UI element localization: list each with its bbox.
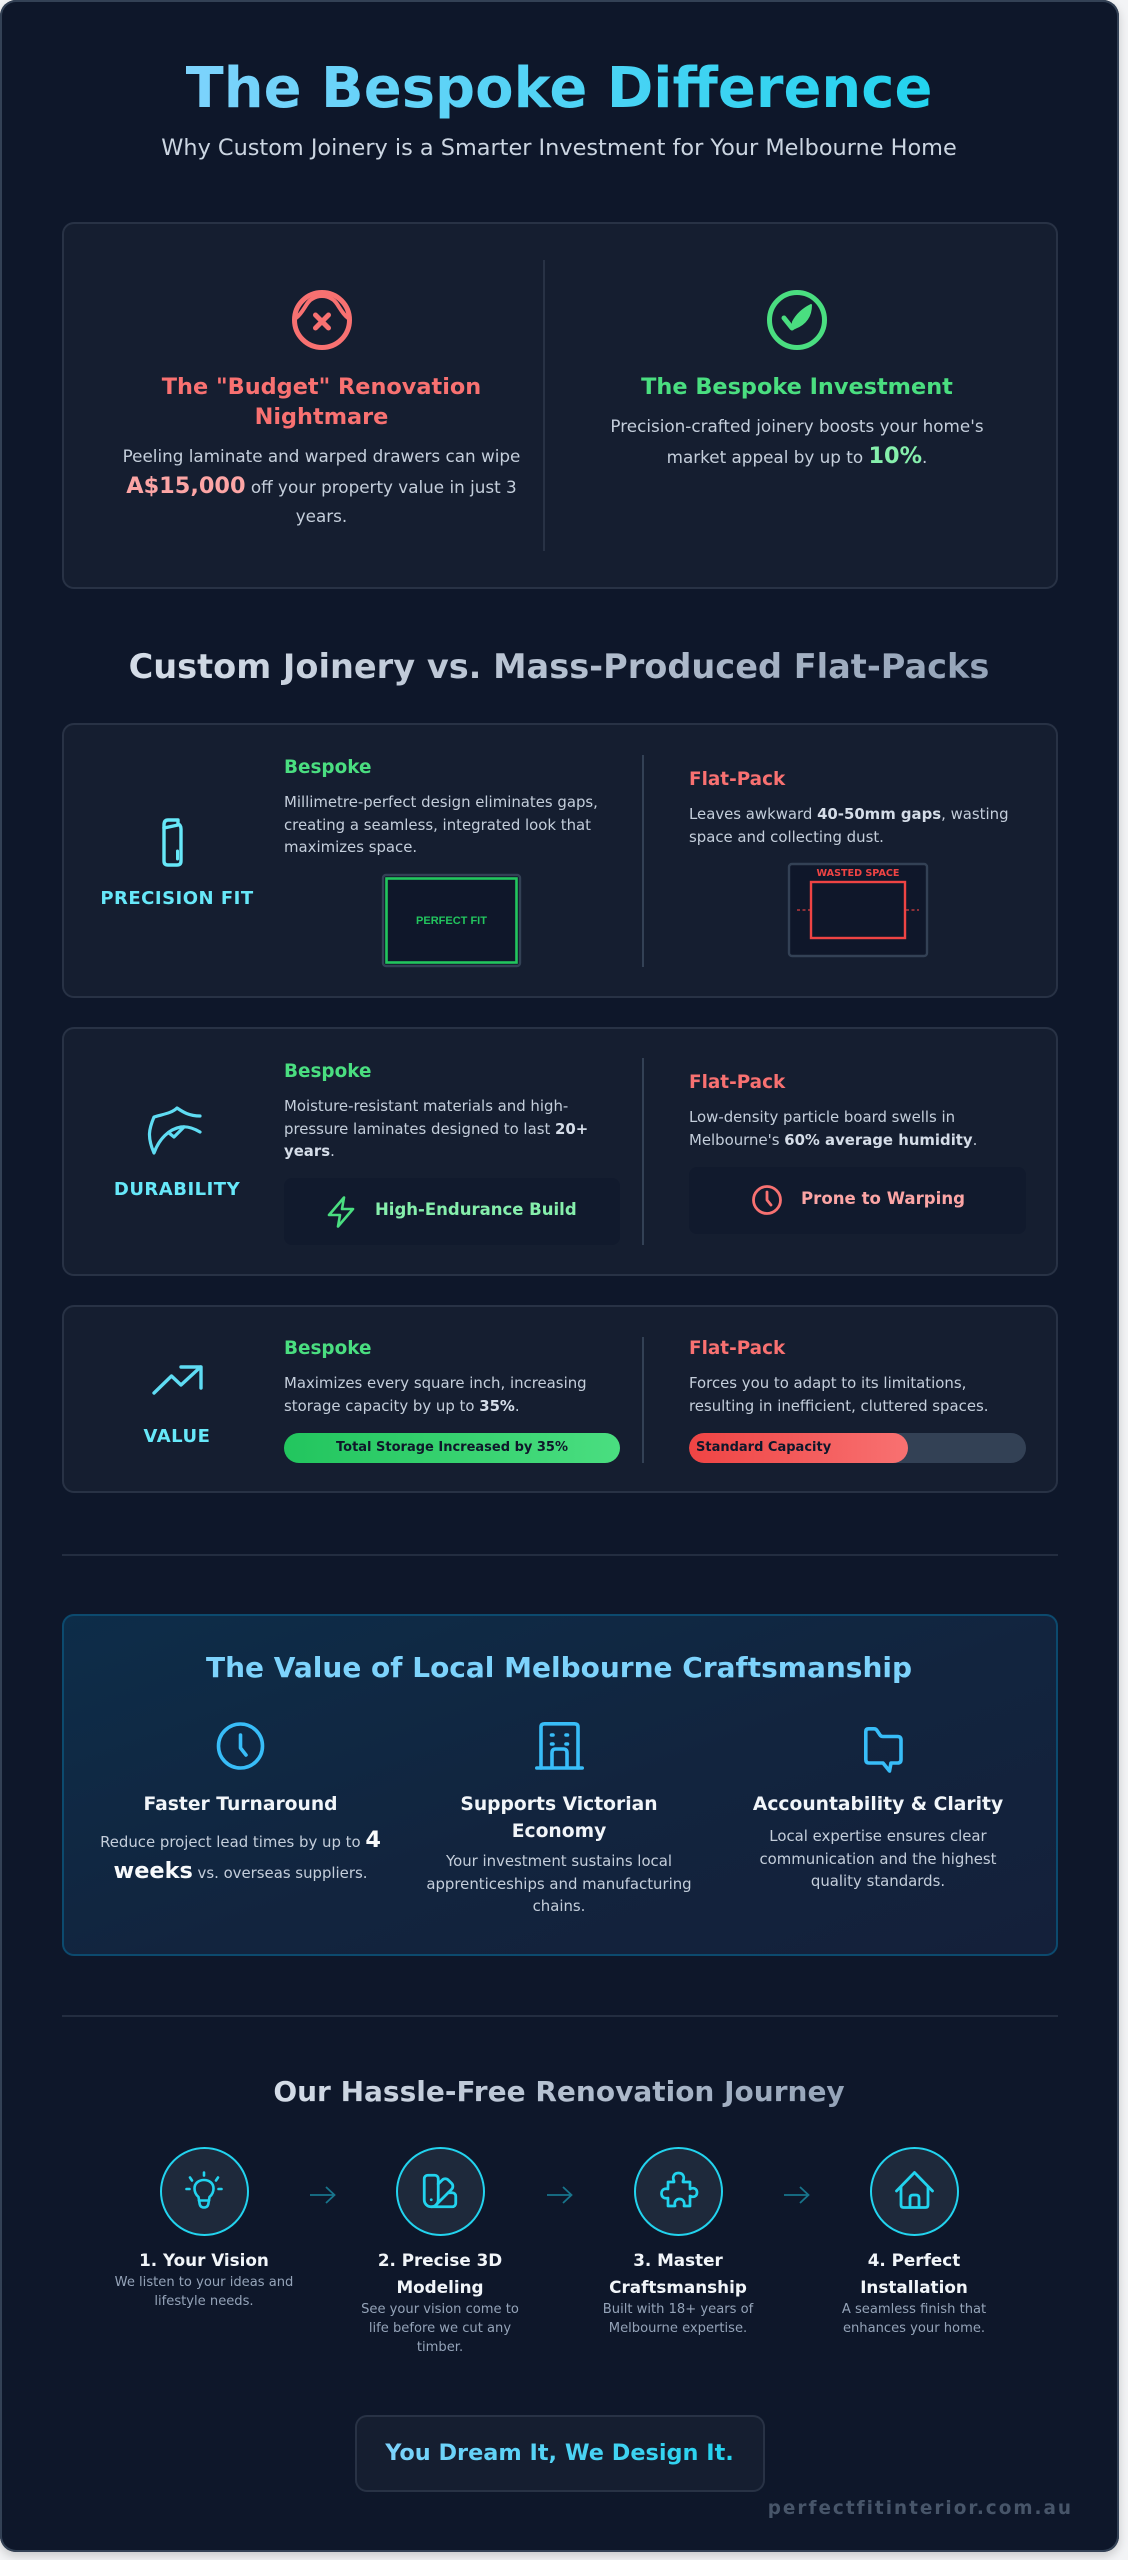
heading: bespoke: Bespoke: [284, 1061, 371, 1082]
panel: problem vs investment: [62, 222, 1058, 589]
icon: value trend: [152, 1365, 203, 1395]
bar fill: Standard Capacity: [696, 1440, 831, 1455]
heading: bespoke investment: The Bespoke Investment: [641, 374, 953, 400]
icon: speech bubble: [864, 1727, 903, 1773]
text: accountability: communication and the highest: [759, 1850, 997, 1868]
step text: [340, 2300, 540, 2357]
heading: budget nightmare: Nightmare: [255, 404, 388, 430]
call to action: [355, 2415, 765, 2492]
bar: total storage: [284, 1433, 620, 1463]
heading: local craftsmanship: The Value of Local Melbourne Craftsmanship: [206, 1651, 912, 1684]
divider: [642, 755, 644, 967]
text: accountability: quality standards.: [811, 1872, 945, 1890]
heading: flat-pack: Flat-Pack: [689, 1072, 785, 1093]
flat-pack column: [689, 769, 1009, 958]
text: bespoke: storage capacity by up to 35%.: [284, 1397, 520, 1415]
text: bespoke: Maximizes every square inch, increasing: [284, 1374, 587, 1392]
divider: [642, 1058, 644, 1245]
text: budget nightmare: [123, 446, 520, 526]
text: bespoke: Millimetre-perfect design eliminates gaps,: [284, 793, 598, 811]
text: bespoke: Moisture-resistant materials and high-: [284, 1097, 568, 1115]
panel: local craftsmanship: [62, 1614, 1058, 1956]
text: bespoke investment: [610, 416, 984, 468]
text: faster turnaround: Reduce project lead times by up to 4: [100, 1827, 381, 1853]
text: flat-pack: [689, 1108, 977, 1149]
step 2: [340, 2147, 540, 2359]
step title: 2. Precise 3D: [378, 2250, 502, 2270]
step text: We listen to your ideas and: [115, 2275, 293, 2290]
text: faster turnaround: [100, 1827, 381, 1884]
step text: lifestyle needs.: [154, 2294, 254, 2309]
icon: building: [535, 1722, 584, 1770]
flat-pack column: [689, 1338, 1026, 1463]
callout: high-endurance build: [284, 1178, 620, 1245]
heading: flat-pack: Flat-Pack: [689, 769, 785, 790]
icon: check circle: [767, 290, 827, 350]
icon: durability: [148, 1106, 202, 1155]
text: bespoke: maximizes space.: [284, 838, 417, 856]
icon: clock: [752, 1185, 782, 1215]
step title: [814, 2247, 1014, 2301]
step title: [340, 2247, 540, 2301]
step text: Built with 18+ years of: [603, 2302, 753, 2317]
bespoke column: [284, 1061, 588, 1228]
divider: [543, 260, 545, 551]
step text: enhances your home.: [843, 2321, 985, 2336]
text: flat-pack: [689, 805, 1009, 846]
arrow 2: [547, 2186, 573, 2204]
bespoke column: [284, 757, 598, 968]
text: bespoke: [284, 1374, 587, 1415]
step text: A seamless finish that: [842, 2302, 986, 2317]
step 4: [814, 2147, 1014, 2339]
heading: budget nightmare: The "Budget" Renovation: [162, 374, 481, 400]
step title: [578, 2247, 778, 2301]
heading: victorian economy: Supports Victorian: [460, 1794, 658, 1815]
heading: flat-pack: Flat-Pack: [689, 1338, 785, 1359]
text: victorian economy: [426, 1852, 692, 1915]
step text: See your vision come to: [361, 2302, 519, 2317]
heading: victorian economy: [460, 1794, 658, 1842]
text: bespoke: years.: [284, 1142, 335, 1160]
subtitle: Why Custom Joinery is a Smarter Investment for Your Melbourne Home: [161, 135, 957, 161]
text: bespoke investment: market appeal by up to 10%.: [667, 442, 927, 468]
column: victorian economy: [426, 1722, 692, 1915]
icon: precision fit: [162, 818, 183, 867]
panel: durability: [62, 1027, 1058, 1276]
icon: swatch book: [396, 2147, 485, 2236]
bar fill: [689, 1433, 908, 1463]
label: precision fit: PRECISION FIT: [100, 888, 254, 909]
icon: house: [870, 2147, 959, 2236]
text: bespoke: [284, 1097, 588, 1160]
text: flat-pack: Forces you to adapt to its limitations,: [689, 1374, 966, 1392]
text: bespoke: creating a seamless, integrated look that: [284, 816, 591, 834]
icon: lightning: [328, 1196, 354, 1228]
text: flat-pack: Leaves awkward 40-50mm gaps, wasting: [689, 805, 1009, 823]
step title: Modeling: [396, 2277, 484, 2297]
column: accountability: [753, 1727, 1003, 1890]
icon: budget warning circle: [292, 290, 352, 350]
step title: 3. Master: [633, 2250, 723, 2270]
text: accountability: [759, 1827, 997, 1890]
divider: [642, 1337, 644, 1463]
step text: Melbourne expertise.: [609, 2321, 747, 2336]
callout: prone to warping: [689, 1167, 1026, 1234]
arrow 1: [310, 2186, 336, 2204]
section heading: comparison: Custom Joinery vs. Mass-Produced Flat-Packs: [129, 647, 989, 686]
footer website: perfectfitinterior.com.au: [768, 2498, 1073, 2519]
diagram: perfect fit: PERFECT FIT: [416, 915, 487, 927]
step text: [115, 2275, 293, 2309]
diagram: perfect fit: [382, 874, 522, 968]
text: budget nightmare: Peeling laminate and warped drawers can wipe: [123, 446, 520, 466]
heading: victorian economy: Economy: [512, 1821, 606, 1842]
step title: Installation: [860, 2277, 968, 2297]
label: durability: DURABILITY: [114, 1179, 240, 1200]
text: flat-pack: space and collecting dust.: [689, 828, 884, 846]
heading: accountability: Accountability & Clarity: [753, 1794, 1003, 1815]
step text: life before we cut any: [369, 2321, 511, 2336]
text: flat-pack: [689, 1374, 988, 1415]
text: faster turnaround: weeks vs. overseas suppliers.: [114, 1858, 367, 1884]
bar: standard capacity: [689, 1433, 1026, 1463]
arrow 3: [784, 2186, 810, 2204]
text: flat-pack: Low-density particle board swells in: [689, 1108, 955, 1126]
column: faster turnaround: [100, 1722, 381, 1884]
text: accountability: Local expertise ensures clear: [769, 1827, 987, 1845]
text: victorian economy: apprenticeships and manufacturing: [426, 1875, 692, 1893]
icon: puzzle: [634, 2147, 723, 2236]
step text: [814, 2300, 1014, 2338]
text: victorian economy: chains.: [533, 1897, 585, 1915]
bar: total storage: Total Storage Increased by 35%: [336, 1440, 568, 1455]
step title: 4. Perfect: [868, 2250, 960, 2270]
text: budget nightmare: years.: [296, 506, 347, 526]
label: value: VALUE: [144, 1426, 210, 1447]
step 3: [578, 2147, 778, 2339]
step text: [578, 2300, 778, 2338]
text: bespoke: [284, 793, 598, 856]
diagram: wasted space: [788, 862, 928, 958]
panel: precision fit: [62, 723, 1058, 998]
heading: budget nightmare: [162, 374, 481, 430]
step title: Craftsmanship: [609, 2277, 747, 2297]
step title: 1. Your Vision: [139, 2250, 269, 2270]
heading: bespoke: Bespoke: [284, 1338, 371, 1359]
step text: timber.: [417, 2340, 463, 2355]
bespoke column: [284, 1338, 620, 1463]
text: flat-pack: resulting in inefficient, cluttered spaces.: [689, 1397, 988, 1415]
flat-pack column: [689, 1072, 977, 1215]
section heading: journey: Our Hassle-Free Renovation Journey: [273, 2075, 845, 2108]
text: bespoke investment: Precision-crafted joinery boosts your home's: [610, 416, 984, 436]
step 1: [115, 2147, 293, 2309]
text: victorian economy: Your investment sustains local: [446, 1852, 672, 1870]
heading: faster turnaround: Faster Turnaround: [143, 1794, 338, 1815]
diagram: wasted space: WASTED SPACE: [817, 868, 899, 879]
text: bespoke: pressure laminates designed to last 20+: [284, 1120, 588, 1138]
text: budget nightmare: A$15,000 off your property value in just 3: [126, 472, 517, 498]
icon: lightbulb: [160, 2147, 249, 2236]
text: flat-pack: Melbourne's 60% average humidity.: [689, 1131, 977, 1149]
panel: value: [62, 1305, 1058, 1493]
text: prone to warping: Prone to Warping: [801, 1189, 965, 1208]
text: high-endurance build: High-Endurance Build: [375, 1200, 577, 1219]
title: The Bespoke Difference: [186, 56, 932, 121]
heading: bespoke: Bespoke: [284, 757, 371, 778]
icon: clock: [216, 1722, 264, 1770]
CTA text: You Dream It, We Design It.: [385, 2440, 734, 2466]
